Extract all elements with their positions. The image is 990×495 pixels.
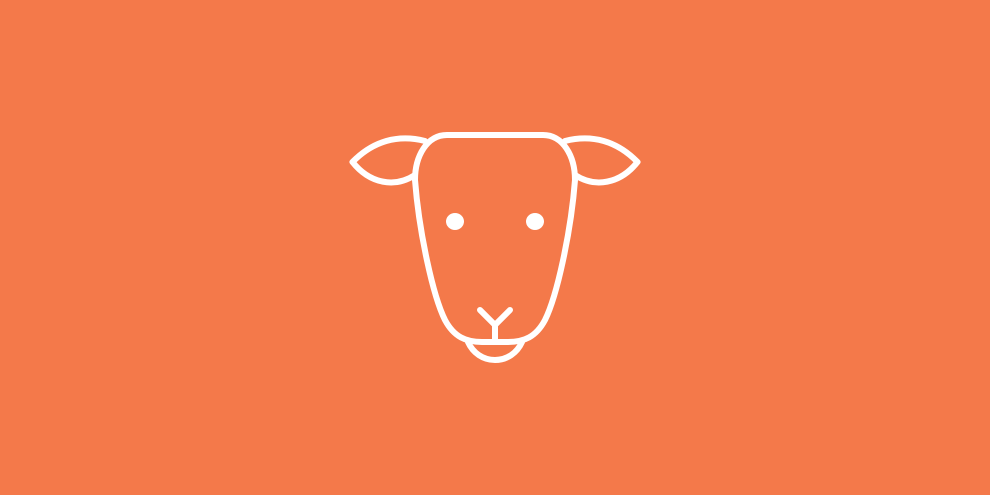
icon: sheep head: [352, 135, 638, 360]
chin: [468, 342, 522, 360]
right ear: [565, 138, 638, 182]
right eye: [526, 213, 544, 230]
left ear: [352, 138, 425, 182]
nose and mouth: [480, 310, 510, 342]
left eye: [446, 213, 464, 230]
eyes: [446, 213, 544, 230]
face outline: [415, 135, 575, 342]
